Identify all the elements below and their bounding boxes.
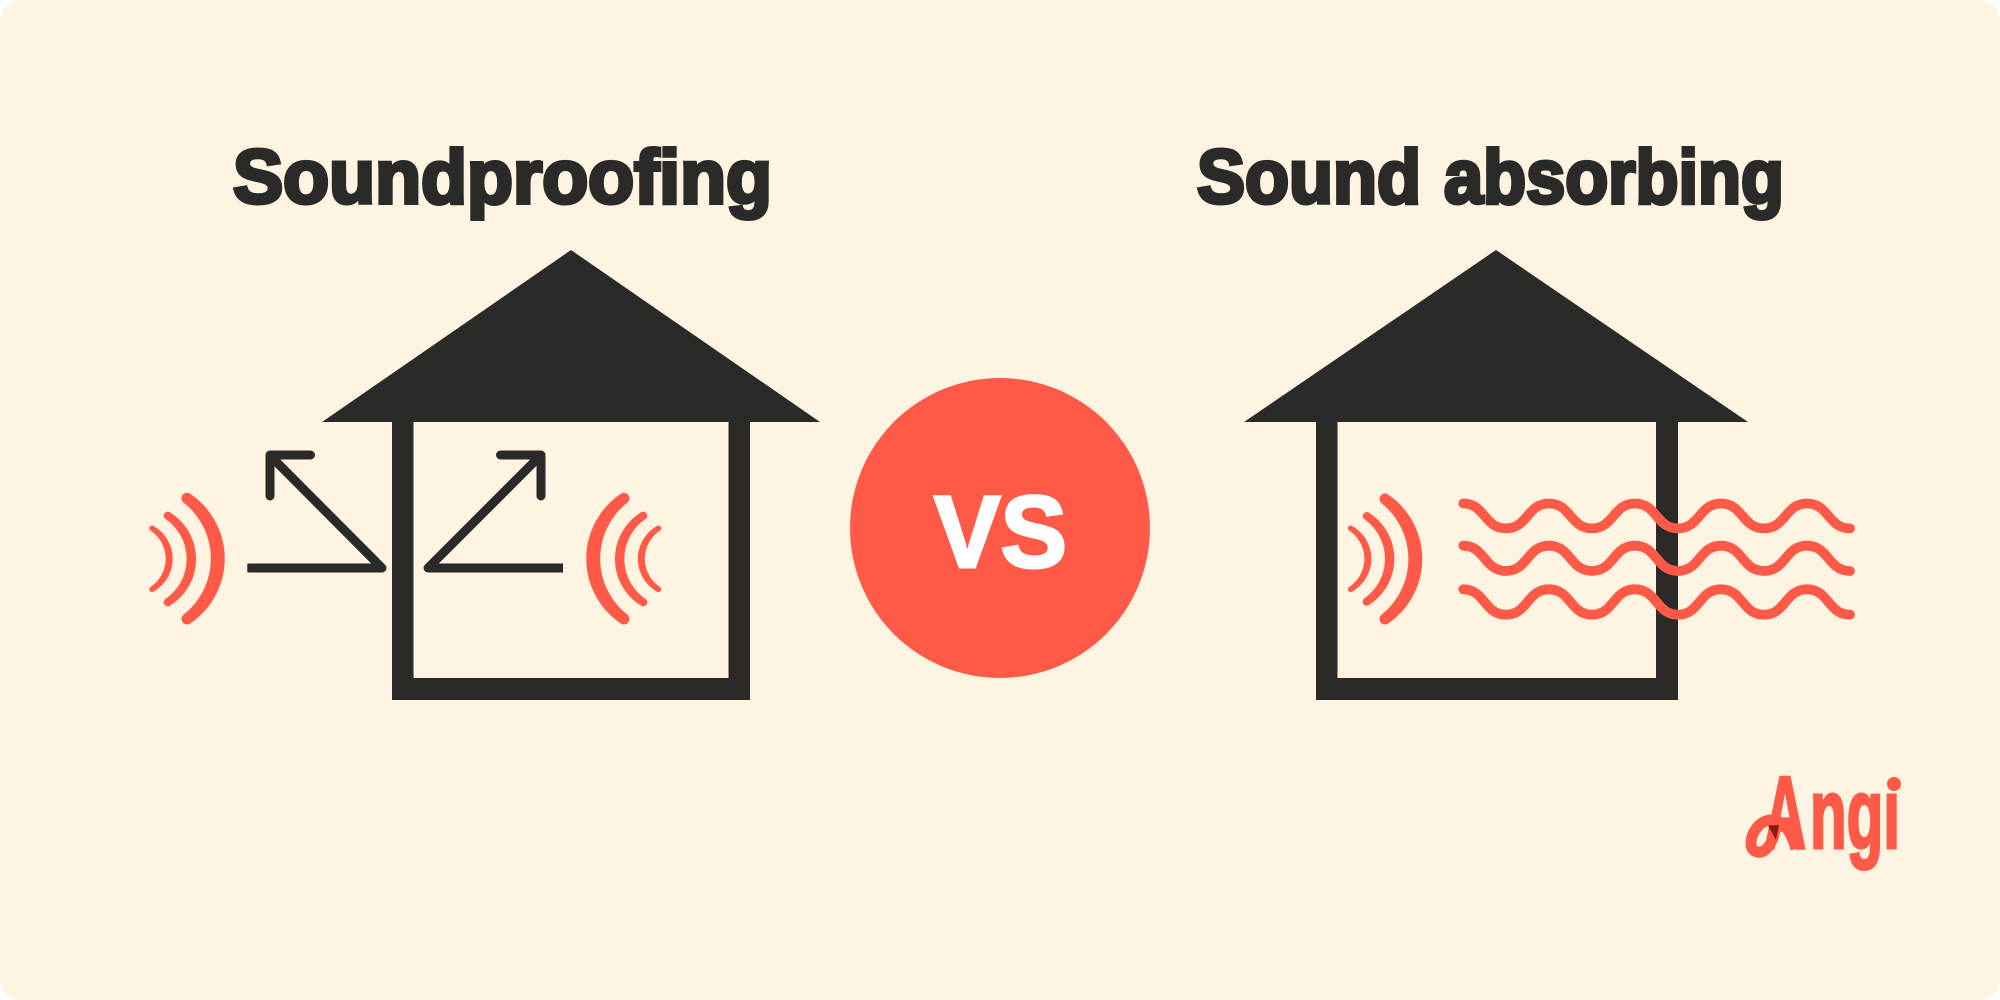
icon: absorbed sound waves — [1463, 504, 1850, 615]
icon: sound waves source — [1351, 499, 1417, 619]
VS badge: VS — [934, 475, 1067, 589]
heading: Soundproofing: Soundproofing — [233, 135, 772, 220]
VS badge — [850, 378, 1150, 678]
heading: Sound absorbing — [1197, 135, 1784, 220]
arrow: sound reflecting inward — [428, 455, 563, 568]
logo: Angi — [1751, 755, 1906, 870]
arrow: sound reflecting outward — [247, 455, 382, 568]
heading: Sound absorbing: absorbing — [1444, 135, 1784, 220]
icon: sound waves outside — [152, 498, 219, 619]
logo: Angi: A — [1764, 755, 1806, 870]
heading: Sound absorbing: Sound — [1197, 135, 1421, 220]
house roof — [322, 250, 820, 422]
panel: sound absorbing house — [1244, 250, 1850, 700]
house walls — [392, 421, 750, 700]
house walls — [1316, 421, 1678, 700]
house roof — [1244, 250, 1748, 422]
logo: Angi: ngi — [1810, 758, 1900, 870]
icon: sound waves inside — [592, 498, 658, 619]
panel: soundproofing house — [152, 250, 820, 700]
